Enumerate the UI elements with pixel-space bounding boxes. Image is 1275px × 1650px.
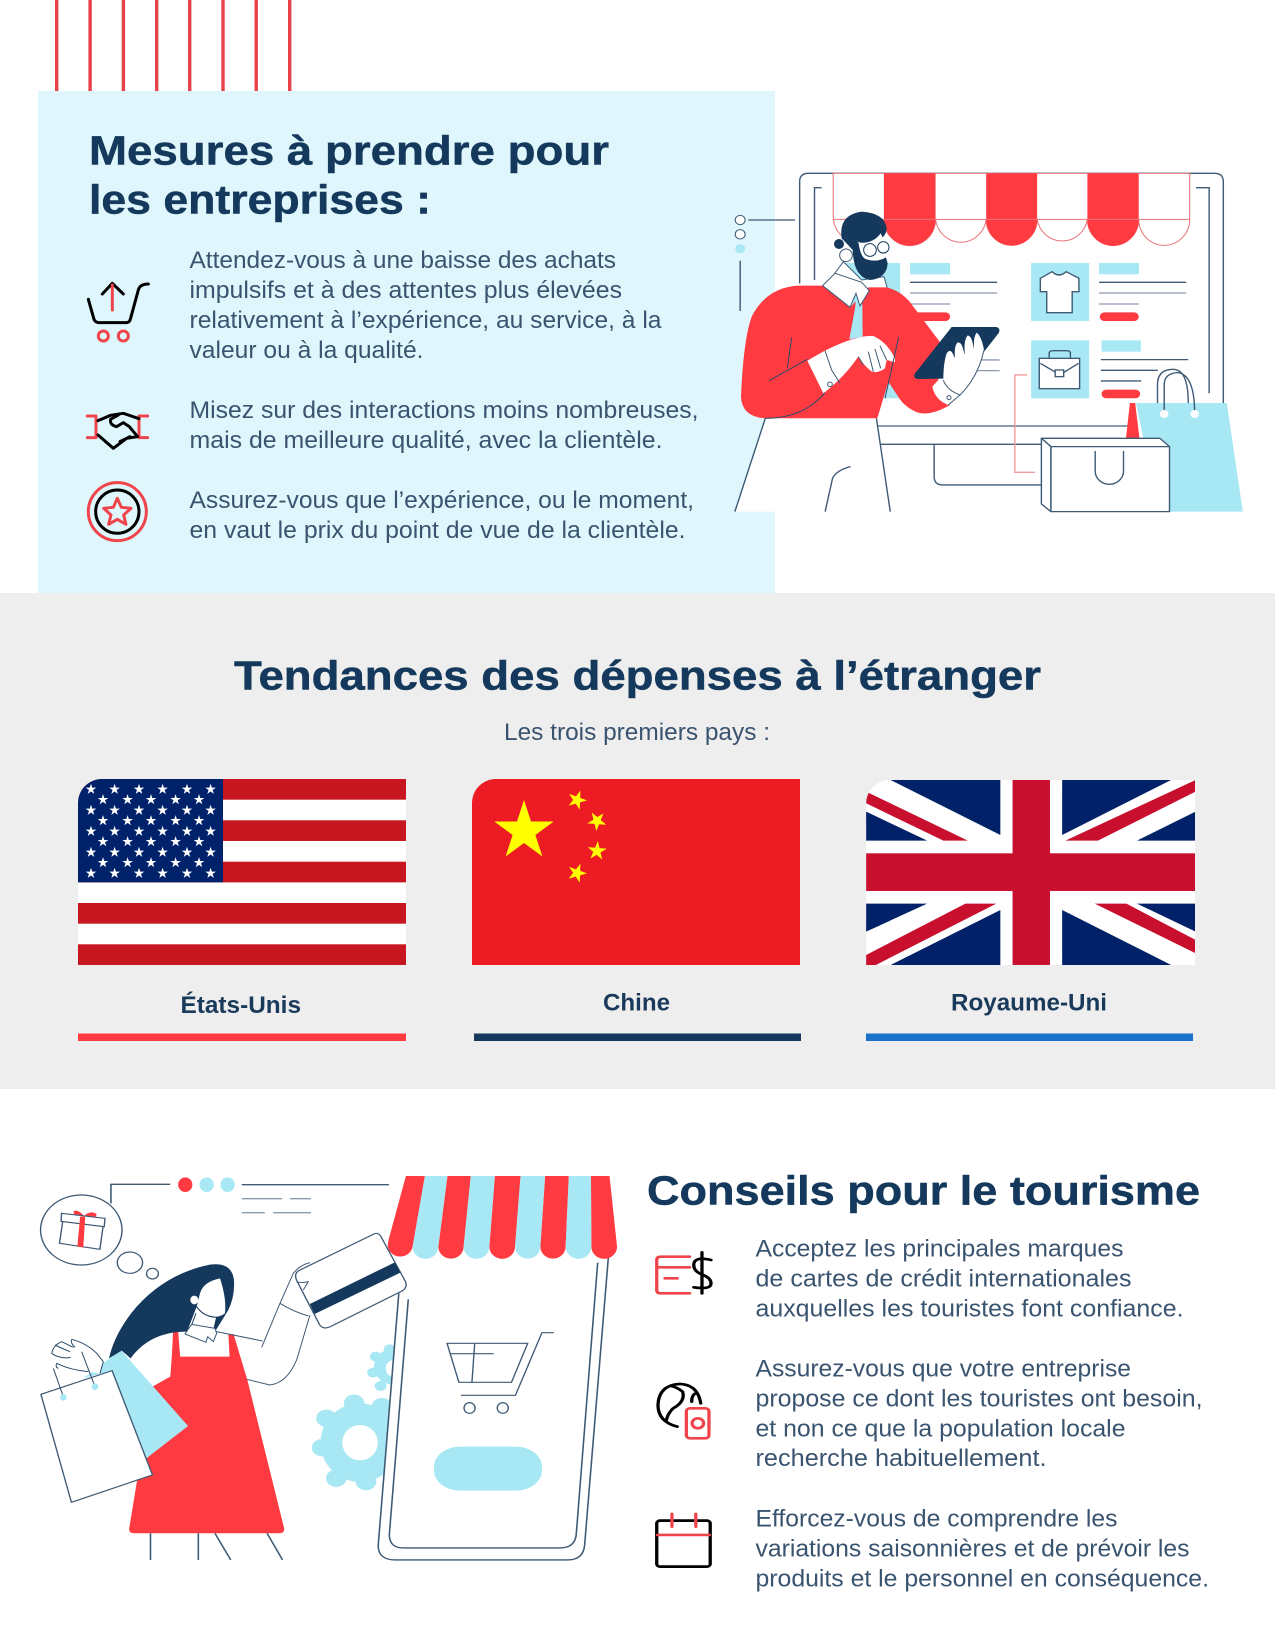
tablet <box>914 327 999 379</box>
heading: conseils: Conseils pour le tourisme <box>647 1167 1200 1213</box>
heading: mesures: Mesures à prendre pour <box>89 128 609 174</box>
collar <box>185 1324 217 1342</box>
label: Royaume-Uni: Royaume-Uni <box>951 990 1107 1017</box>
gears <box>312 1344 413 1490</box>
hair <box>109 1264 234 1358</box>
text: cartes de crédit: Acceptez les principales marques <box>756 1236 1124 1263</box>
product cards <box>842 263 1188 398</box>
torso <box>741 286 903 418</box>
text: interactions <box>190 397 698 454</box>
illustration: femme et boutique mobile <box>41 1176 617 1560</box>
flag: Royaume-Uni <box>866 780 1196 965</box>
dress <box>129 1332 284 1533</box>
legs <box>150 1533 283 1560</box>
text: cartes de crédit <box>756 1236 1184 1322</box>
right hand <box>932 333 984 405</box>
thought bubble with gift <box>41 1195 158 1279</box>
section: tendances des dépenses <box>0 593 1275 1089</box>
subtitle: Les trois premiers pays : <box>504 719 770 746</box>
text: variations saisonnières: Efforcez-vous de comprendre les <box>756 1506 1118 1533</box>
text: besoins des touristes: recherche habituellement. <box>756 1445 1046 1472</box>
box <box>1041 438 1170 512</box>
text: variations saisonnières: produits et le personnel en conséquence. <box>756 1565 1209 1592</box>
icon: calendrier <box>657 1514 710 1567</box>
illustration: homme haut du corps <box>741 212 999 418</box>
arm <box>217 1263 310 1385</box>
status dots <box>735 215 795 311</box>
text: interactions: Misez sur des interactions moins nombreuses, <box>190 397 698 424</box>
label: États-Unis: États-Unis <box>180 991 301 1019</box>
panel: conseils pour le tourisme <box>647 1167 1209 1592</box>
button on phone <box>434 1447 542 1491</box>
hand and bag handle <box>52 1339 103 1401</box>
right arm <box>885 287 950 413</box>
heading: tendances: Tendances des dépenses à l’étranger <box>234 652 1041 698</box>
icon: panier avec flèche <box>88 283 148 341</box>
cart on phone <box>447 1333 554 1413</box>
icon: étoile <box>88 483 146 541</box>
illustration: homme et boutique en ligne <box>735 173 1243 512</box>
text: besoins des touristes <box>756 1356 1202 1472</box>
text: baisse des achats: impulsifs et à des attentes plus élevées <box>190 277 622 304</box>
head <box>834 212 889 280</box>
text: baisse des achats: valeur ou à la qualité. <box>190 337 424 364</box>
icon: poignée de main <box>87 413 148 448</box>
icon: carte et dollar <box>657 1252 711 1293</box>
label: États-Unis <box>78 991 406 1041</box>
text: baisse des achats <box>190 247 662 364</box>
heading: mesures <box>89 128 609 222</box>
text: baisse des achats: relativement à l’expérience, au service, à la <box>190 307 662 334</box>
tie <box>849 293 863 339</box>
illustration: femme haut du corps <box>52 1263 310 1401</box>
face <box>190 1278 225 1328</box>
phone <box>378 1257 608 1560</box>
top lines and dots <box>111 1177 389 1213</box>
icon: globe et téléphone <box>658 1384 709 1438</box>
text: expérience <box>190 487 694 544</box>
text: interactions: mais de meilleure qualité, avec la clientèle. <box>190 427 662 454</box>
left hand <box>807 336 895 393</box>
collar <box>823 273 869 307</box>
text: besoins des touristes: propose ce dont les touristes ont besoin, <box>756 1386 1202 1412</box>
heading: mesures: les entreprises : <box>89 176 431 222</box>
awning <box>833 173 1190 246</box>
arm lines <box>765 337 899 418</box>
awning <box>388 1176 617 1259</box>
text: variations saisonnières: variations saisonnières et de prévoir les <box>756 1536 1190 1562</box>
flag: Chine <box>472 779 800 965</box>
credit card <box>296 1233 406 1328</box>
decorative red lines <box>55 0 291 91</box>
text: baisse des achats: Attendez-vous à une baisse des achats <box>190 247 616 274</box>
panel: mesures pour les entreprises <box>38 91 775 593</box>
neck <box>188 1307 217 1332</box>
text: cartes de crédit: auxquelles les touristes font confiance. <box>756 1295 1184 1322</box>
white bag <box>41 1371 152 1502</box>
monitor <box>800 173 1223 485</box>
label: Chine <box>474 990 801 1041</box>
text: variations saisonnières <box>756 1506 1209 1592</box>
text: besoins des touristes: Assurez-vous que votre entreprise <box>756 1356 1131 1383</box>
connector <box>1015 375 1035 472</box>
flag: États-Unis <box>78 779 406 965</box>
label: Chine: Chine <box>603 990 670 1017</box>
blue bag <box>83 1350 188 1458</box>
text: cartes de crédit: de cartes de crédit internationales <box>756 1266 1132 1292</box>
text: expérience: Assurez-vous que l’expérience, ou le moment, <box>190 487 694 514</box>
text: expérience: en vaut le prix du point de vue de la clientèle. <box>190 517 686 544</box>
pants <box>735 418 890 512</box>
text: besoins des touristes: et non ce que la population locale <box>756 1415 1126 1442</box>
neck <box>830 262 887 290</box>
shopping bag <box>1126 369 1243 512</box>
label: Royaume-Uni <box>866 990 1193 1041</box>
